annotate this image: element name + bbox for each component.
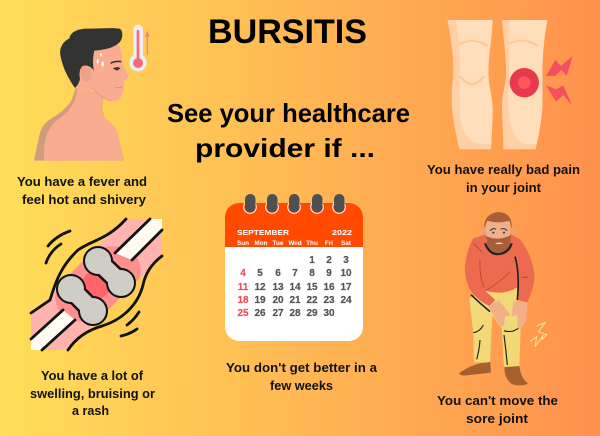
icon: calendar: 1 <box>309 255 315 266</box>
icon: knees with pain <box>447 20 573 149</box>
icon: calendar: 27 <box>272 308 284 319</box>
caption: swelling: swelling, bruising or <box>30 386 155 401</box>
icon: calendar: 10 <box>340 268 352 279</box>
icon: man holding sore knee <box>459 212 547 385</box>
icon: calendar: 16 <box>323 282 335 293</box>
title: BURSITIS <box>208 13 367 51</box>
icon: calendar: 26 <box>254 308 266 319</box>
icon: calendar: 30 <box>323 308 335 319</box>
caption: can't move: You can't move the <box>437 393 558 408</box>
icon: calendar: 19 <box>254 295 266 306</box>
icon: calendar: Wed <box>288 240 302 247</box>
icon: calendar: 23 <box>323 295 335 306</box>
icon: calendar: 29 <box>306 308 318 319</box>
caption: can't move <box>437 393 558 426</box>
icon: swollen joint <box>31 219 162 350</box>
caption: bad pain: in your joint <box>466 180 542 195</box>
subtitle: See your healthcare <box>167 98 410 128</box>
icon: calendar: 9 <box>326 268 332 279</box>
icon: calendar: 5 <box>257 268 263 279</box>
icon: calendar: 22 <box>306 295 318 306</box>
icon: calendar: 28 <box>289 308 301 319</box>
icon: calendar: Sun <box>237 240 249 247</box>
icon: calendar: 2 <box>326 255 332 266</box>
caption: fever: You have a fever and <box>17 174 147 189</box>
icon: calendar: 8 <box>309 268 315 279</box>
icon: calendar: 14 <box>289 282 301 293</box>
caption: bad pain: You have really bad pain <box>427 162 580 177</box>
icon: calendar: 24 <box>340 295 352 306</box>
caption: swelling: You have a lot of <box>41 368 144 383</box>
icon: calendar: 13 <box>272 282 284 293</box>
icon: calendar: 11 <box>238 282 249 293</box>
caption: fever <box>17 174 147 207</box>
icon: calendar: 15 <box>306 282 318 293</box>
icon: calendar: 12 <box>254 282 266 293</box>
icon: calendar: 6 <box>275 268 281 279</box>
icon: man with fever <box>34 25 150 161</box>
caption: can't move: sore joint <box>466 411 529 426</box>
icon: calendar <box>225 194 363 341</box>
icon: calendar: 20 <box>272 295 284 306</box>
caption: fever: feel hot and shivery <box>22 192 147 207</box>
subtitle: provider if ... <box>195 133 375 163</box>
icon: calendar: Sat <box>341 240 352 247</box>
caption: no improvement <box>226 360 378 393</box>
caption: no improvement: You don't get better in a <box>226 360 378 375</box>
icon: calendar: 2022 <box>332 228 352 237</box>
icon: calendar: Fri <box>325 240 333 247</box>
icon: calendar: 3 <box>343 255 349 266</box>
caption: swelling <box>30 368 155 418</box>
icon: calendar: Mon <box>254 240 268 247</box>
caption: bad pain <box>427 162 580 195</box>
icon: calendar: 17 <box>340 282 352 293</box>
icon: calendar: Tue <box>273 240 284 247</box>
icon: calendar: 18 <box>237 295 249 306</box>
subtitle <box>167 98 410 163</box>
icon: calendar: SEPTEMBER <box>237 228 290 237</box>
icon: calendar: 21 <box>289 295 301 306</box>
caption: swelling: a rash <box>72 403 109 418</box>
icon: calendar: 4 <box>240 268 246 279</box>
caption: no improvement: few weeks <box>270 378 333 393</box>
icon: calendar: 25 <box>237 308 249 319</box>
icon: calendar: Thu <box>306 240 318 247</box>
icon: calendar: 7 <box>292 268 298 279</box>
